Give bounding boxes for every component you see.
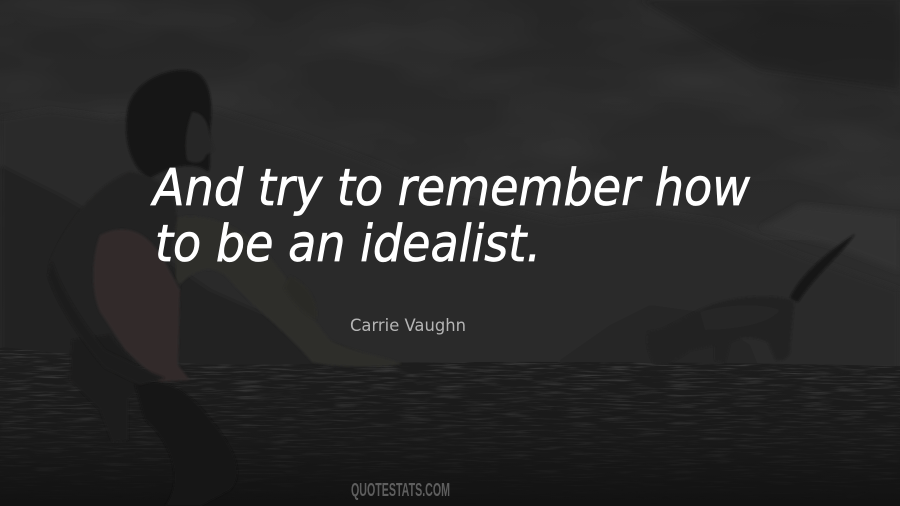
woman: arm bbox=[48, 262, 165, 385]
quote text bbox=[150, 159, 750, 274]
woman: dress skirt bbox=[70, 335, 150, 442]
background: distant mountains bbox=[0, 110, 900, 380]
author name: Carrie Vaughn bbox=[350, 316, 466, 336]
cat: body bbox=[647, 297, 794, 364]
figure: seated woman bbox=[48, 70, 402, 506]
woman: hair and head bbox=[126, 70, 211, 178]
woman: far leg and foot bbox=[176, 216, 402, 367]
cat: fur highlight bbox=[700, 305, 780, 330]
quote line 2: to be an idealist. bbox=[155, 215, 541, 274]
tree log foreground bbox=[0, 345, 900, 506]
woman: near leg bbox=[135, 382, 237, 506]
woman: torso and arm bbox=[49, 172, 180, 378]
cat: tail bbox=[790, 234, 855, 302]
woman: dress bbox=[93, 229, 190, 382]
quote line 1: And try to remember how bbox=[150, 159, 750, 218]
woman: face bbox=[186, 112, 214, 163]
woman: hand on knee bbox=[284, 276, 317, 320]
watermark: QUOTESTATS.COM bbox=[351, 480, 450, 500]
figure: cat bbox=[647, 234, 855, 364]
